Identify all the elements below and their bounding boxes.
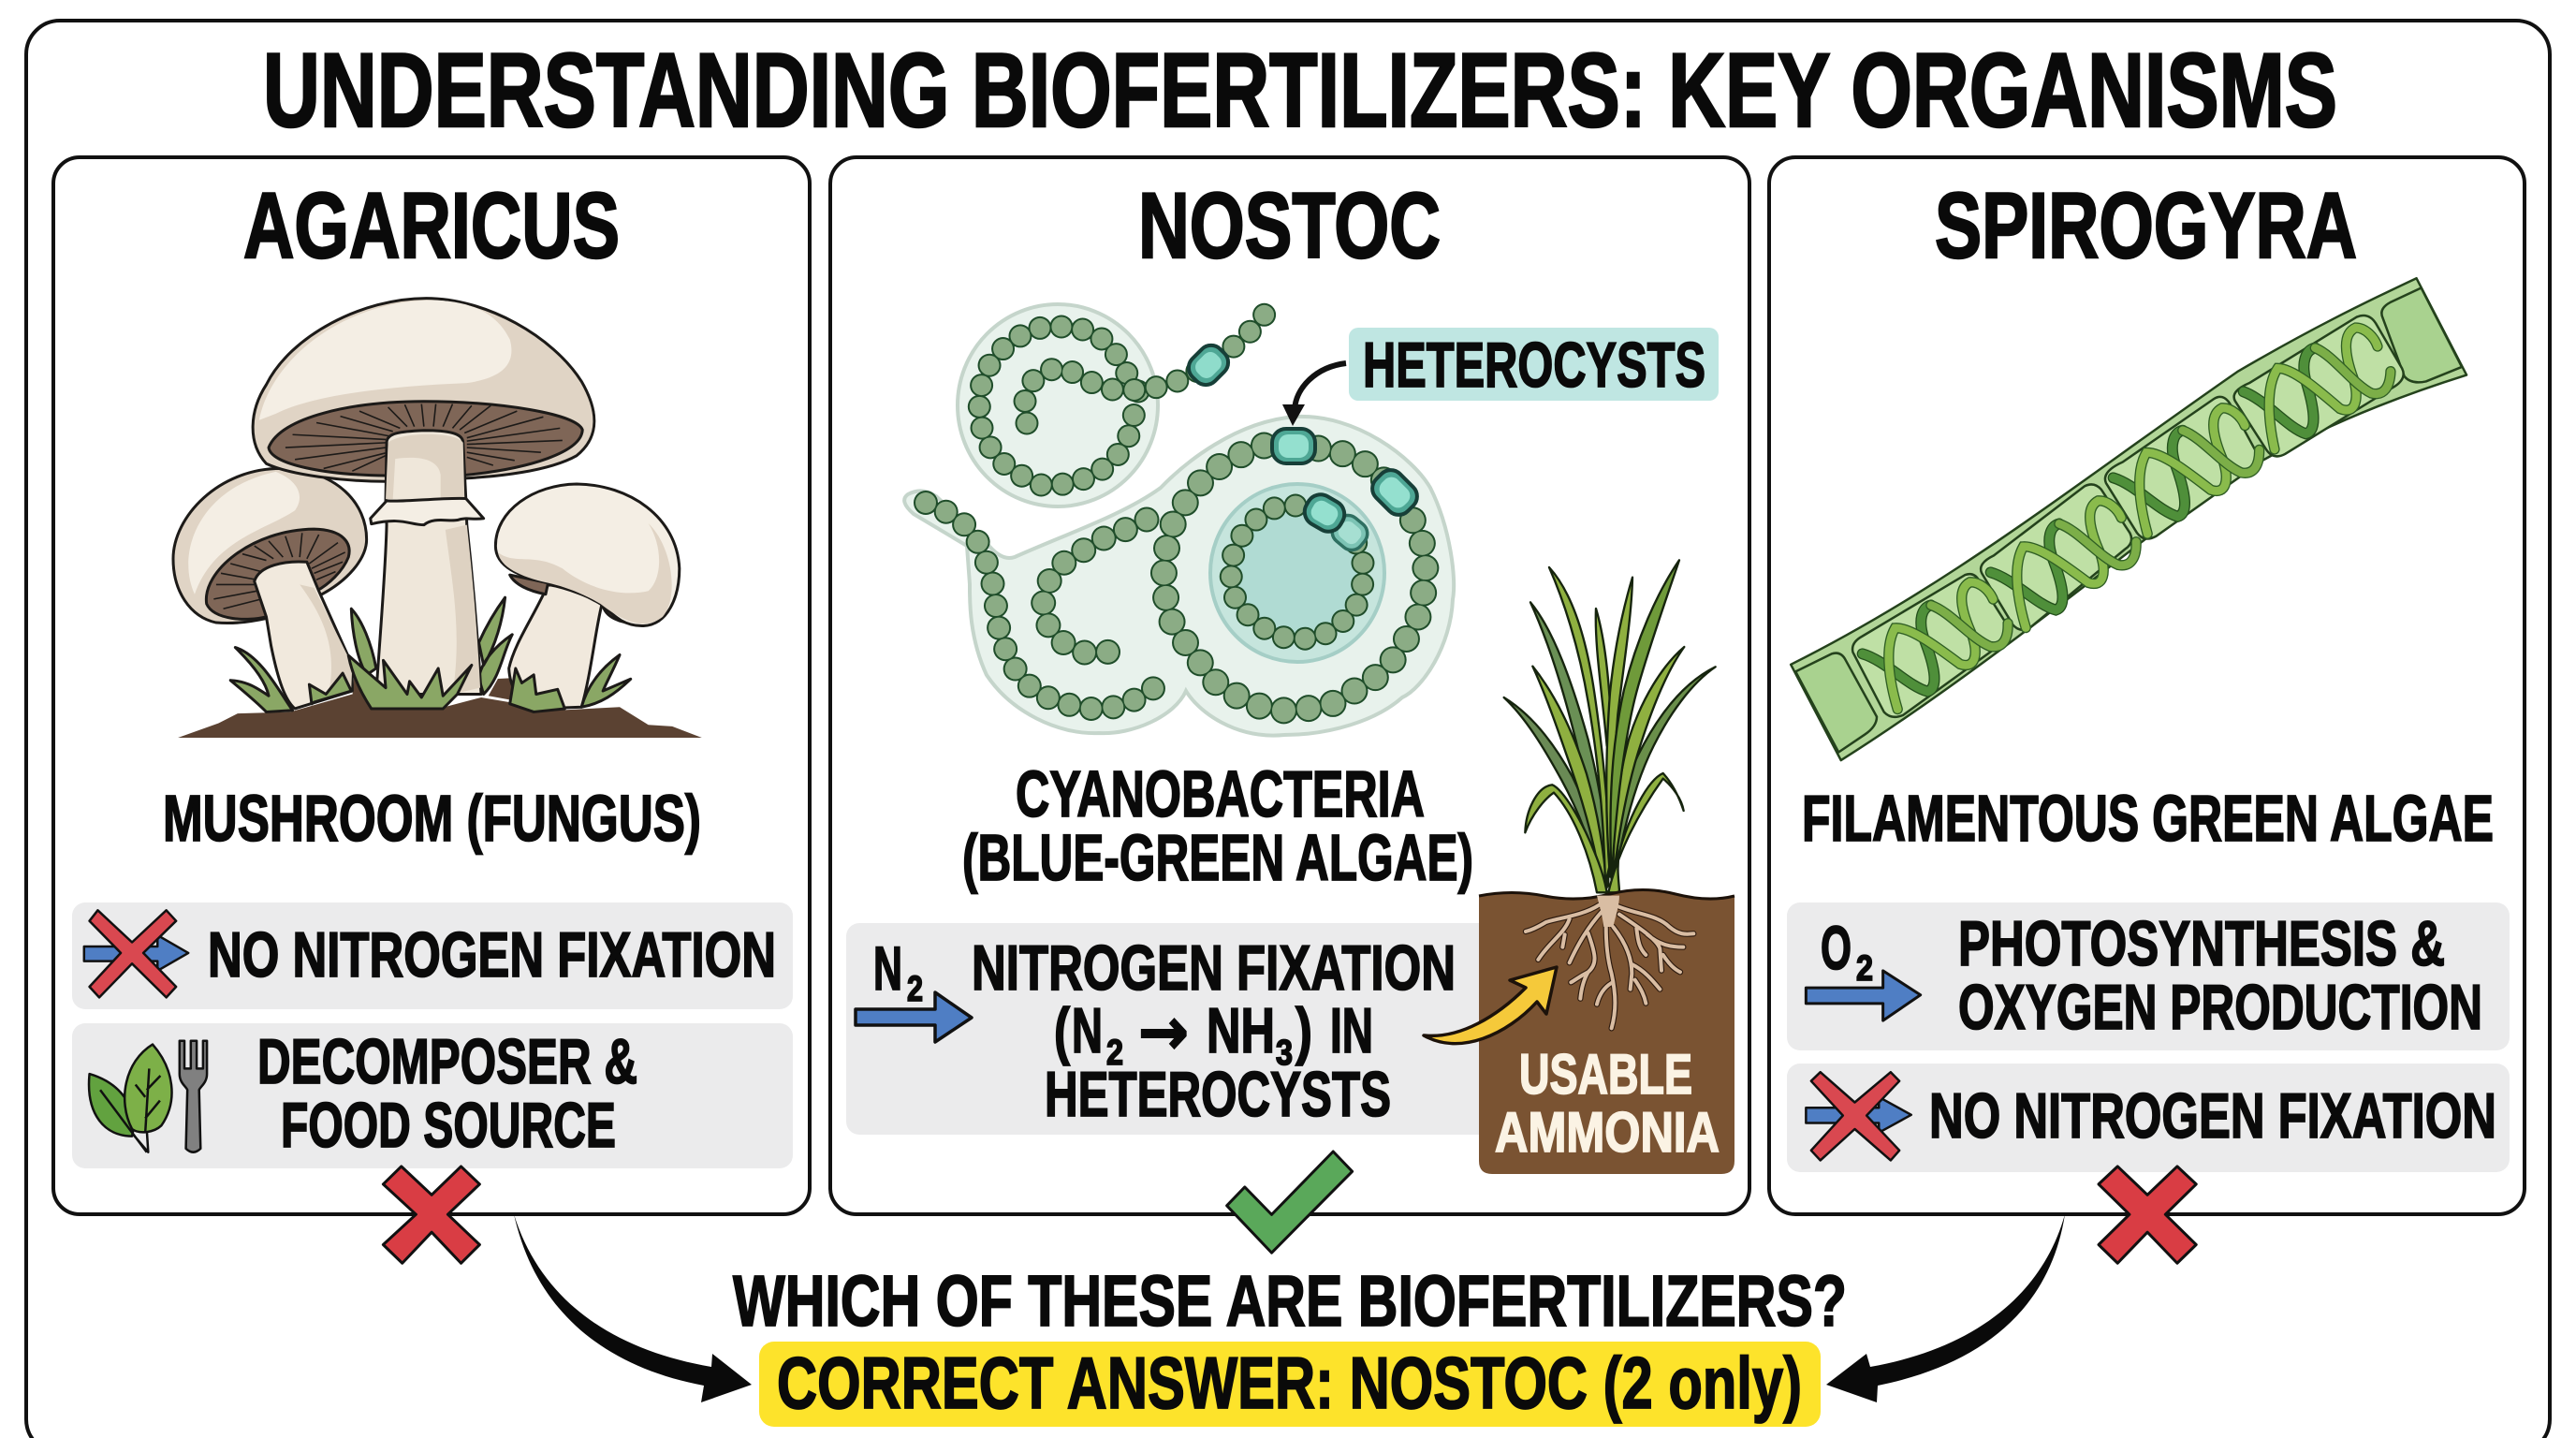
icon: blue arrow [1806, 971, 1921, 1020]
row text: NITROGEN FIXATION [972, 932, 1456, 1004]
question: WHICH OF THESE ARE BIOFERTILIZERS? [733, 1261, 1847, 1342]
row text: N [1072, 995, 1103, 1066]
illustration: soil block [1479, 889, 1734, 1174]
row text: IN [1330, 995, 1373, 1066]
panel: agaricus [53, 157, 810, 1263]
row: no nitrogen fixation [1787, 1064, 2510, 1172]
heterocyst cells [1183, 340, 1423, 555]
nostoc subtitle: CYANOBACTERIA [1016, 757, 1425, 830]
agaricus panel border [53, 157, 810, 1214]
spirogyra panel border [1769, 157, 2525, 1214]
spirogyra heading: SPIROGYRA [1935, 173, 2357, 277]
label: O2: O [1821, 913, 1852, 982]
row text: ) [1295, 995, 1312, 1066]
arrow: yellow ammonia arrow [1424, 967, 1557, 1044]
row text: ( [1054, 995, 1070, 1066]
nostoc subtitle: (BLUE-GREEN ALGAE) [962, 821, 1473, 894]
row text: HETEROCYSTS [1045, 1059, 1391, 1130]
agaricus subtitle: MUSHROOM (FUNGUS) [163, 782, 701, 855]
icon: red cross for agaricus [383, 1167, 479, 1263]
row text [1958, 908, 2482, 1043]
chloroplast spirals [1858, 328, 2391, 712]
row background [1787, 1064, 2510, 1172]
label: N2: 2 [907, 970, 923, 1009]
icon: green check for nostoc [1227, 1152, 1353, 1253]
illustration: plant leaves [1504, 560, 1716, 892]
panel: spirogyra [1769, 157, 2525, 1263]
row background [846, 923, 1492, 1135]
row: no nitrogen fixation [72, 902, 793, 1009]
row background [72, 1023, 793, 1168]
row text: → [1138, 993, 1189, 1070]
callout: heterocysts label: HETEROCYSTS [1363, 330, 1705, 401]
icon: crossed arrow [1806, 1072, 1911, 1160]
row text: NO NITROGEN FIXATION [208, 919, 776, 990]
icon: crossed arrow [84, 910, 188, 997]
row background [1787, 902, 2510, 1050]
row background [72, 902, 793, 1009]
icon: red cross for spirogyra [2099, 1167, 2196, 1263]
label: O2: 2 [1856, 949, 1873, 989]
label: N2: N [873, 933, 902, 1003]
arrow: label to heterocyst [1282, 363, 1346, 426]
cell chains [926, 311, 1426, 711]
illustration: spirogyra filament [1791, 278, 2466, 760]
nostoc subtitle [962, 757, 1473, 894]
illustration: nostoc colonies [904, 304, 1454, 736]
answer banner: CORRECT ANSWER: NOSTOC (2 only) [777, 1342, 1802, 1424]
soil label [1495, 1043, 1720, 1164]
illustration: mushrooms [173, 299, 702, 738]
soil label: USABLE [1519, 1043, 1692, 1106]
soil label: AMMONIA [1495, 1101, 1720, 1164]
row text: 2 [1106, 1034, 1123, 1073]
row text [257, 1026, 637, 1161]
arrow: right curved to answer [1826, 1214, 2065, 1402]
agaricus heading: AGARICUS [243, 173, 620, 277]
row text: NH [1207, 995, 1275, 1066]
icon: leaves and fork [89, 1041, 207, 1152]
nostoc heading: NOSTOC [1138, 173, 1441, 277]
row text: 3 [1276, 1034, 1293, 1073]
row: decomposer and food source [72, 1023, 793, 1168]
row text [972, 932, 1456, 1130]
row text: DECOMPOSER & [257, 1026, 637, 1097]
row: photosynthesis and oxygen [1787, 902, 2510, 1050]
row: nitrogen fixation [846, 923, 1492, 1135]
nostoc panel border [830, 157, 1749, 1214]
icon: blue arrow [856, 992, 972, 1042]
arrow: left curved to answer [514, 1214, 752, 1402]
panel: nostoc [830, 157, 1749, 1253]
row text: FOOD SOURCE [281, 1090, 616, 1161]
plant roots [1526, 896, 1693, 1028]
